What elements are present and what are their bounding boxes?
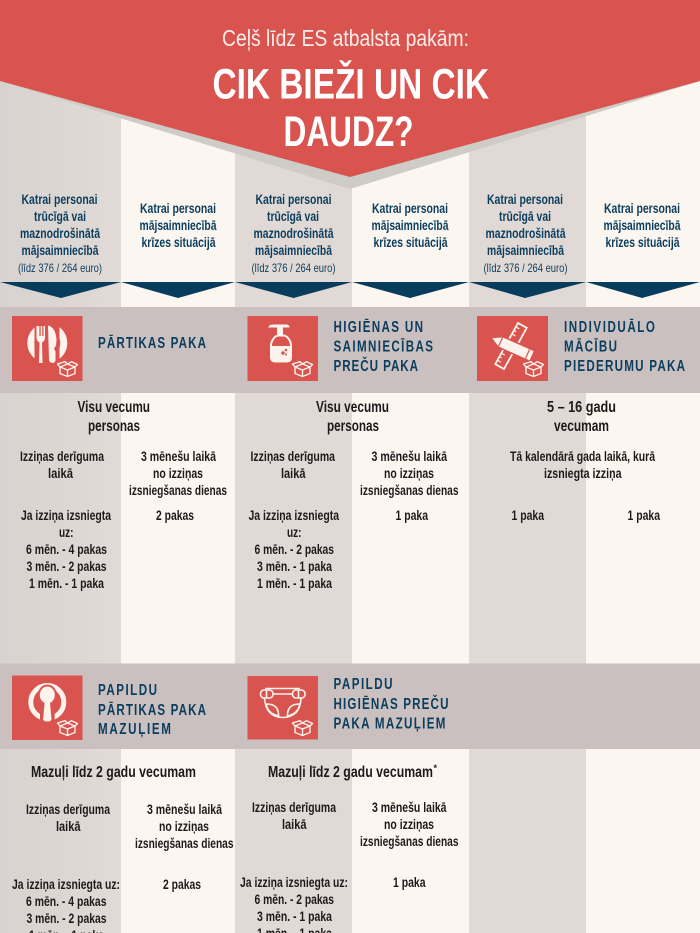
quantities left: Ja izziņa izsniegta (21, 507, 111, 523)
quantity right: 2 pakas (163, 876, 201, 892)
quantity right: 1 paka (396, 507, 428, 523)
quantities left: 6 mēn. - 2 pakas (254, 891, 334, 907)
validity left (252, 799, 336, 832)
label: diaper package: HIGIĒNAS PREČU (334, 695, 449, 712)
baby hygiene details (240, 763, 459, 933)
hygiene package details (248, 399, 459, 591)
label: school supplies package (564, 318, 685, 374)
quantity right: 1 paka (393, 874, 426, 890)
validity right: izsniegšanas dienas (360, 482, 459, 498)
validity right: no izziņas (384, 816, 434, 832)
age group (78, 399, 150, 435)
validity left: laikā (56, 818, 81, 834)
header: column 6 (604, 200, 681, 250)
validity left: Izziņas derīguma (250, 448, 335, 464)
label: diaper package (334, 675, 449, 732)
header: column 4: mājsaimniecībā (372, 217, 449, 233)
validity right: 3 mēnešu laikā (372, 448, 447, 464)
age group: * (434, 763, 438, 773)
validity left: laikā (282, 816, 307, 832)
age group: 5 – 16 gadu (547, 399, 616, 416)
quantities left: 6 mēn. - 2 pakas (254, 541, 334, 557)
header: column 5 (484, 191, 568, 275)
icon: baby food package (12, 676, 82, 740)
main title (212, 60, 489, 156)
label: hygiene package: PREČU PAKA (334, 357, 418, 374)
validity right: no izziņas (384, 465, 434, 481)
icon: school supplies package (477, 316, 548, 381)
header: column 5: Katrai personai (487, 191, 563, 207)
header: column 3 (252, 191, 336, 275)
header: column 3: trūcīgā vai (267, 208, 319, 224)
quantities left: 3 mēn. - 1 paka (257, 908, 332, 924)
quantities left: 6 mēn. - 4 pakas (26, 893, 107, 909)
header: column 3: maznodrošinātā (254, 225, 334, 241)
quantities left: Ja izziņa izsniegta uz: (240, 874, 348, 890)
header: column 1: mājsaimniecībā (22, 242, 99, 258)
quantity right: 1 paka (628, 507, 660, 523)
header: column 3: mājsaimniecībā (255, 242, 332, 258)
quantities left: uz: (59, 524, 74, 540)
quantities left (21, 507, 111, 591)
header: column 2: krīzes situācijā (142, 234, 216, 250)
label: school supplies package: PIEDERUMU PAKA (564, 357, 685, 374)
icon: diaper package (248, 676, 318, 740)
header: column 1: Katrai personai (22, 191, 98, 207)
header banner (0, 0, 700, 189)
age group: personas (327, 418, 379, 435)
header: column 1 (18, 191, 102, 275)
quantities left: 3 mēn. - 2 pakas (26, 910, 107, 926)
validity: Tā kalendārā gada laikā, kurā (510, 448, 655, 464)
column headers (18, 191, 681, 275)
quantities left: uz: (287, 524, 302, 540)
quantity left: 1 paka (512, 507, 544, 523)
age group: Visu vecumu (78, 399, 150, 416)
label: diaper package: PAPILDU (334, 675, 393, 692)
quantities left: Ja izziņa izsniegta (248, 507, 339, 523)
header: column 1: (līdz 376 / 264 euro) (18, 261, 102, 275)
navy chevrons (0, 282, 700, 298)
label: school supplies package: INDIVIDUĀLO (564, 318, 655, 335)
header: column 2: mājsaimniecībā (140, 217, 217, 233)
validity right: izsniegšanas dienas (135, 835, 234, 851)
validity left: laikā (48, 465, 73, 481)
header: column 4: Katrai personai (372, 200, 448, 216)
validity right: izsniegšanas dienas (129, 482, 227, 498)
validity right (360, 799, 459, 849)
validity (510, 448, 655, 481)
quantities left: 6 mēn. - 4 pakas (26, 541, 107, 557)
header: column 4: krīzes situācijā (374, 234, 448, 250)
quantities left (248, 507, 339, 591)
validity right (360, 448, 459, 498)
header: column 2: Katrai personai (140, 200, 216, 216)
quantities left (12, 876, 120, 933)
quantities left: 3 mēn. - 1 paka (257, 558, 332, 574)
main title: DAUDZ? (284, 108, 414, 156)
label: baby food package: PĀRTIKAS PAKA (98, 701, 206, 718)
school supplies details (510, 399, 660, 523)
validity right (129, 448, 227, 498)
validity right: izsniegšanas dienas (360, 833, 459, 849)
label: hygiene package: SAIMNIECĪBAS (334, 338, 433, 355)
label: baby food package (98, 681, 206, 737)
icon: food package (12, 316, 82, 381)
validity: izsniegta izziņa (544, 465, 622, 481)
quantities left: 3 mēn. - 2 pakas (26, 558, 107, 574)
validity left: laikā (281, 465, 306, 481)
validity right (135, 801, 234, 851)
label: diaper package: PAKA MAZUĻIEM (334, 715, 445, 732)
header: column 2 (140, 200, 217, 250)
quantity right: 2 pakas (156, 507, 194, 523)
age group (547, 399, 616, 435)
validity right: no izziņas (153, 465, 203, 481)
subtitle: Ceļš līdz ES atbalsta pakām: (222, 25, 469, 51)
quantities left (240, 874, 348, 933)
age group: personas (88, 418, 140, 435)
label: hygiene package (334, 318, 433, 374)
age group: Visu vecumu (316, 399, 389, 416)
validity left: Izziņas derīguma (20, 448, 104, 464)
icon: hygiene package (248, 316, 318, 381)
label: baby food package: PAPILDU (98, 681, 157, 698)
validity left: Izziņas derīguma (252, 799, 336, 815)
band 1 background (0, 307, 700, 393)
age group: Mazuļi līdz 2 gadu vecumam (268, 764, 433, 781)
validity left: Izziņas derīguma (26, 801, 110, 817)
validity left (20, 448, 104, 481)
header: column 1: maznodrošinātā (20, 225, 100, 241)
age group (316, 399, 389, 435)
label: school supplies package: MĀCĪBU (564, 338, 617, 355)
quantities left: 1 mēn. - 1 paka (29, 575, 104, 591)
header: column 5: (līdz 376 / 264 euro) (484, 261, 568, 275)
main title: CIK BIEŽI UN CIK (212, 60, 489, 108)
label: hygiene package: HIGIĒNAS UN (334, 318, 423, 335)
header: column 5: mājsaimniecībā (487, 242, 564, 258)
label: food package: PĀRTIKAS PAKA (98, 334, 206, 351)
validity left (26, 801, 110, 834)
header: column 5: maznodrošinātā (486, 225, 566, 241)
header: column 3: Katrai personai (256, 191, 332, 207)
validity right: 3 mēnešu laikā (147, 801, 222, 817)
header: column 5: trūcīgā vai (499, 208, 551, 224)
header: column 4 (372, 200, 449, 250)
label: baby food package: MAZUĻIEM (98, 720, 171, 737)
validity right: 3 mēnešu laikā (141, 448, 216, 464)
header: column 3: (līdz 376 / 264 euro) (252, 261, 336, 275)
validity right: no izziņas (159, 818, 209, 834)
quantities left: 1 mēn. - 1 paka (257, 575, 332, 591)
validity left (250, 448, 335, 481)
band 2 background (0, 664, 700, 749)
header: column 1: trūcīgā vai (34, 208, 86, 224)
age group: vecumam (554, 418, 609, 435)
validity right: 3 mēnešu laikā (372, 799, 447, 815)
baby food details (12, 764, 234, 933)
quantities left: Ja izziņa izsniegta uz: (12, 876, 120, 892)
age group: Mazuļi līdz 2 gadu vecumam (31, 764, 196, 781)
food package details (20, 399, 227, 591)
